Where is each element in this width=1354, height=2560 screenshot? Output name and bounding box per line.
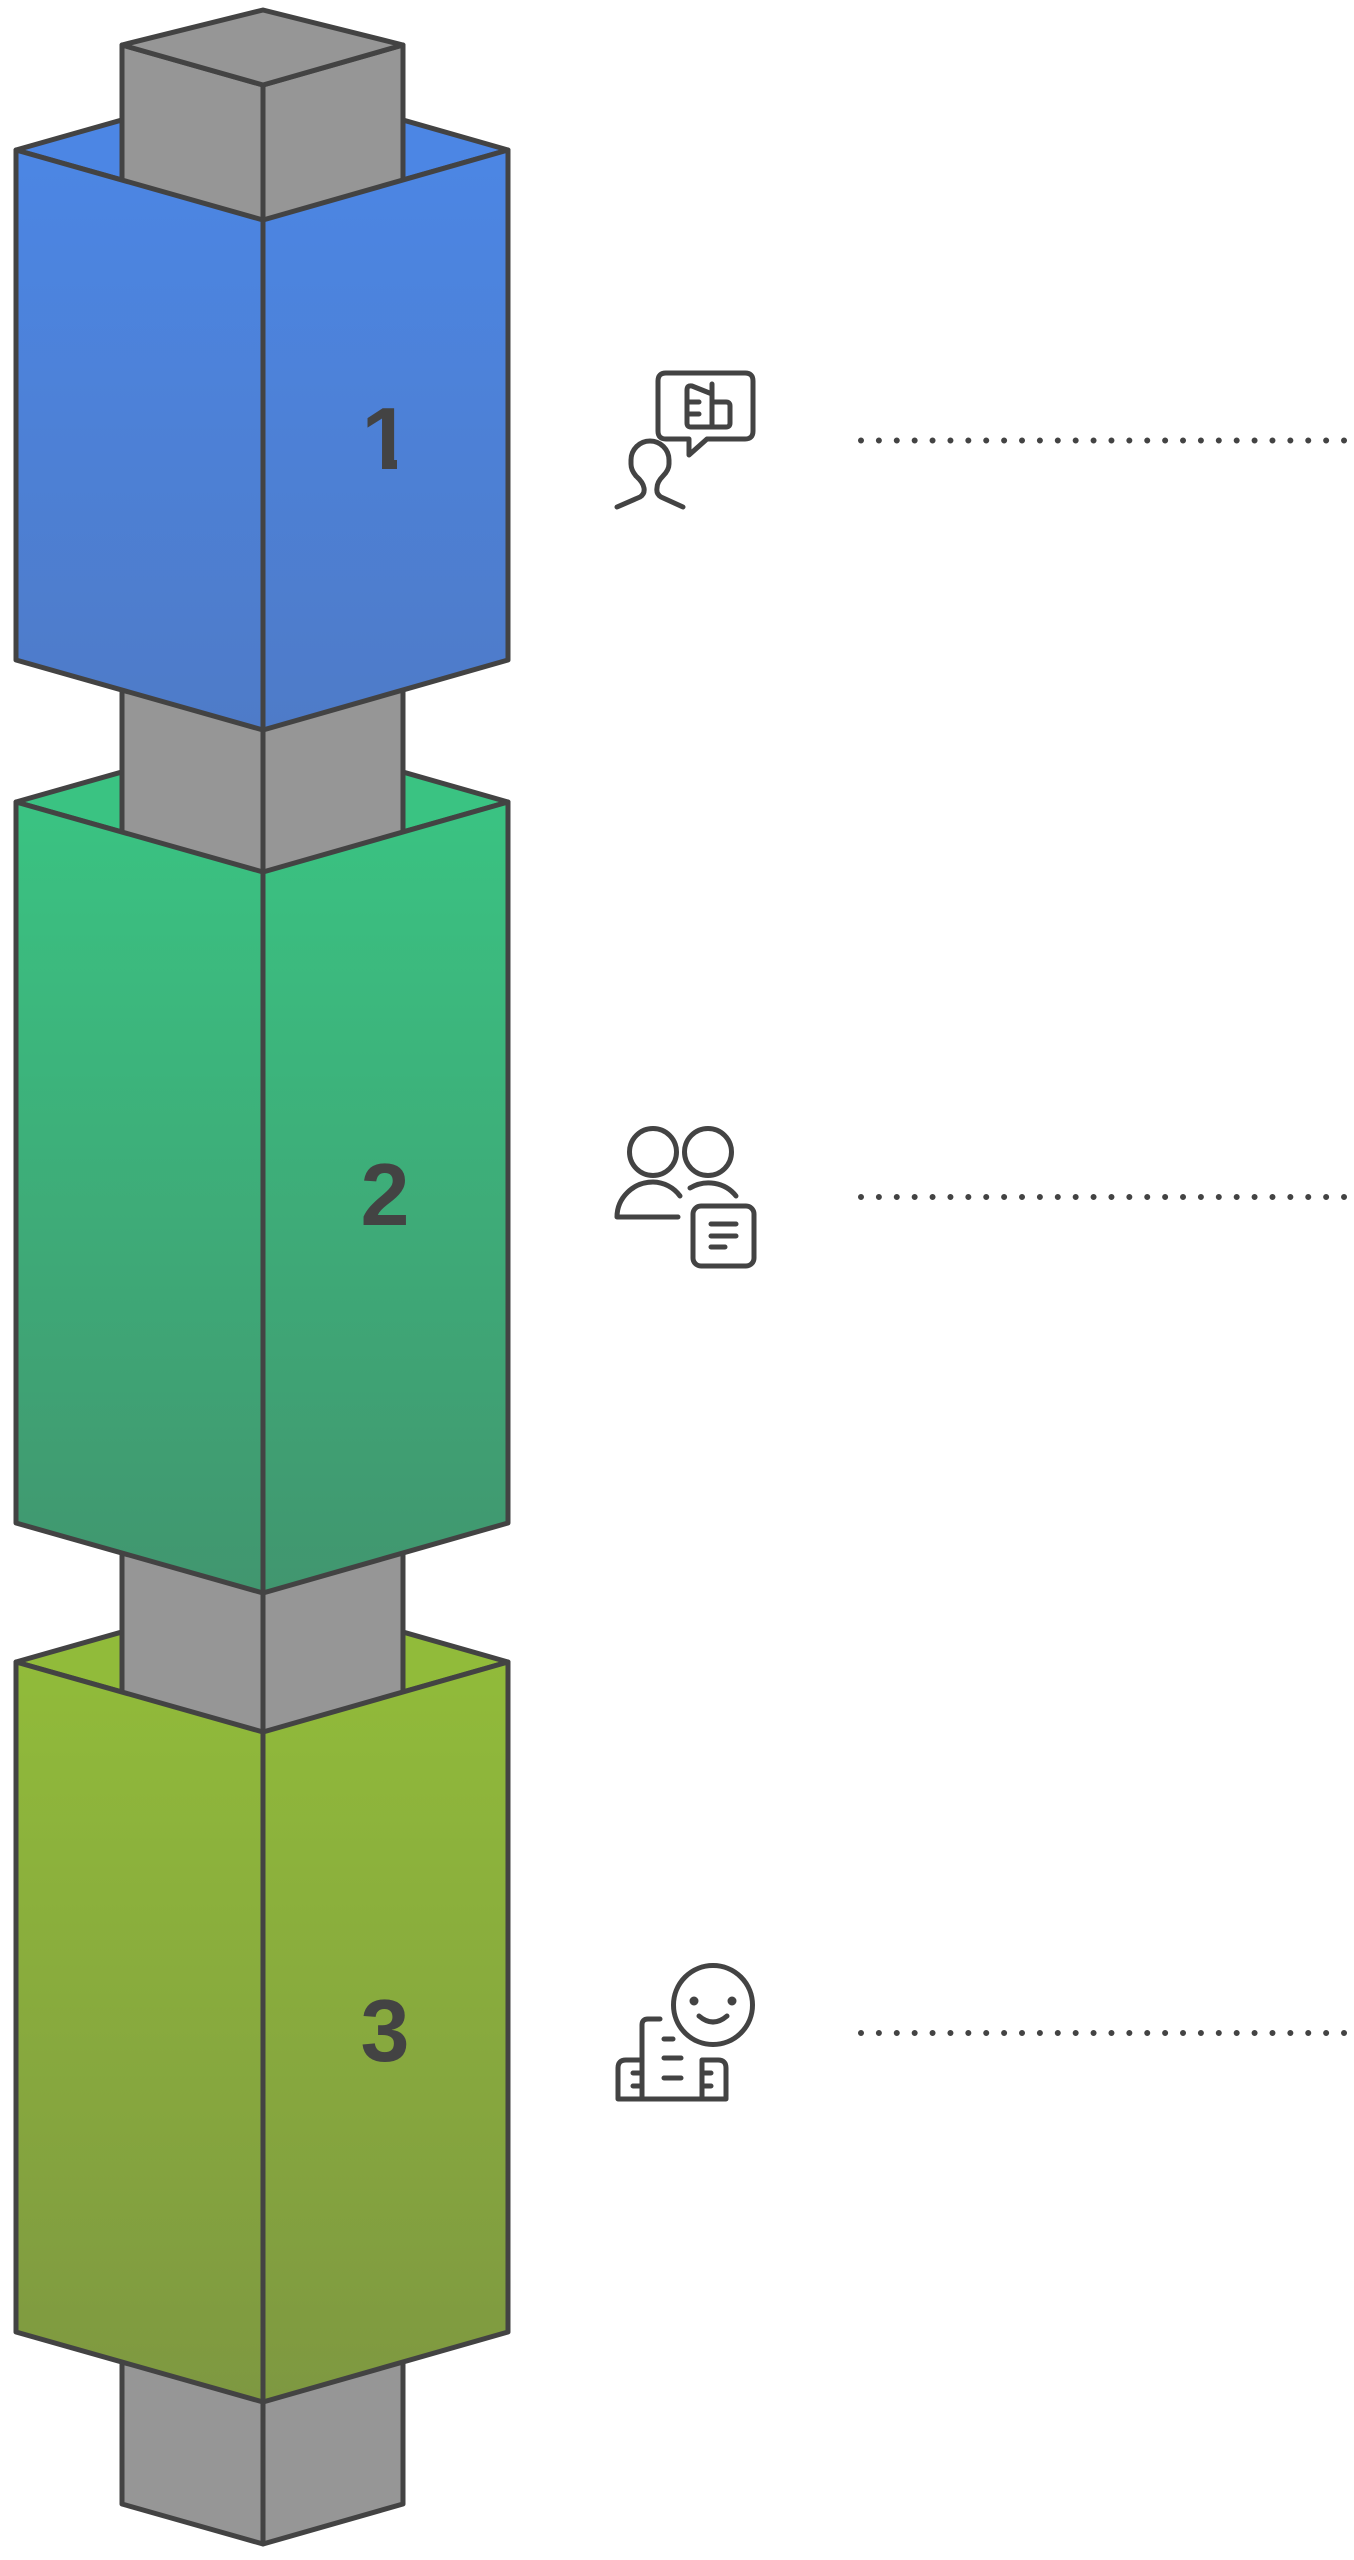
number 3: 3	[361, 1981, 409, 2080]
dotted leader 2	[861, 1194, 1346, 1200]
icon: smiling face with buildings	[618, 1966, 752, 2099]
block 1 top face	[16, 80, 508, 220]
dotted leader 1	[861, 438, 1346, 444]
block 1: blue	[16, 150, 508, 730]
block 2: green	[16, 802, 508, 1593]
block 3 right face	[263, 1662, 508, 2402]
shaft left face	[122, 45, 263, 2544]
number 2: 2	[361, 1145, 409, 1244]
icon: person with speech bubble and book	[617, 373, 753, 507]
block 2 top face	[16, 732, 508, 872]
icon: two people with document	[617, 1128, 754, 1266]
block 3 top face	[16, 1592, 508, 1732]
number 1: 1	[362, 389, 410, 488]
shaft right face	[263, 45, 403, 2544]
block 1 left face	[16, 150, 263, 730]
block 2 left face	[16, 802, 263, 1593]
block 3: lime	[16, 1662, 508, 2402]
block 1 right face	[263, 150, 508, 730]
block 2 right face	[263, 802, 508, 1593]
shaft top cap	[122, 10, 403, 85]
central grey shaft	[122, 10, 403, 2544]
block 3 left face	[16, 1662, 263, 2402]
dotted leader 3	[861, 2030, 1346, 2036]
